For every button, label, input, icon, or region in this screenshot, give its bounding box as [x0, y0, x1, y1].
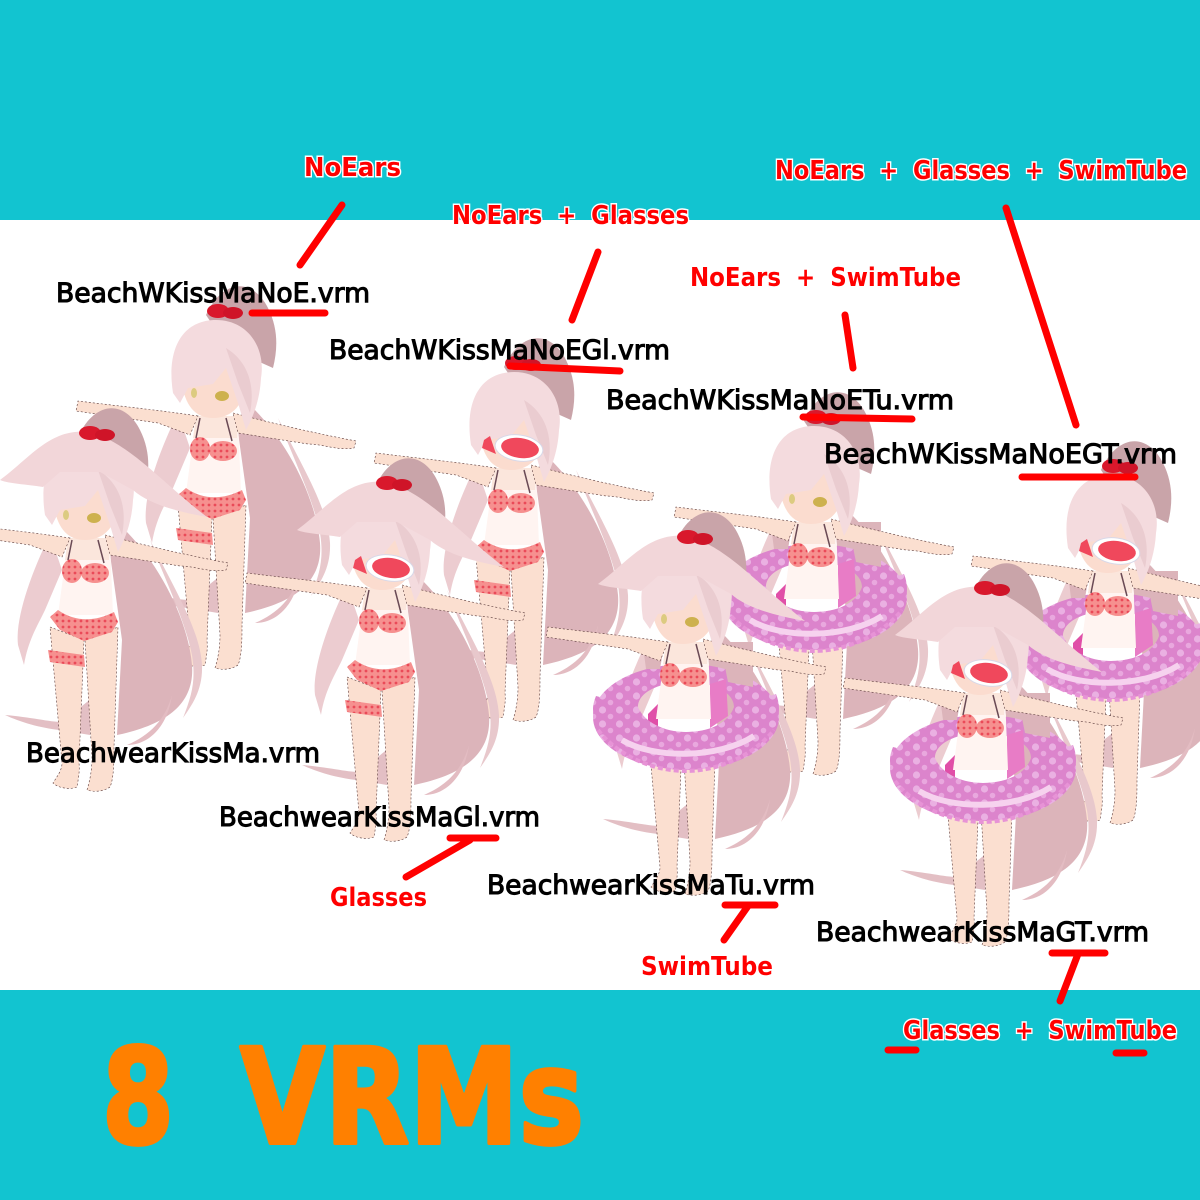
filename: BeachWKissMaNoETu: BeachWKissMaNoETu.vrm	[606, 385, 954, 416]
filename: BeachwearKissMaTu: BeachwearKissMaTu.vrm	[487, 870, 815, 901]
filename: BeachWKissMaNoEGl: BeachWKissMaNoEGl.vrm	[329, 335, 670, 366]
pointer: SwimTube	[724, 905, 775, 940]
filename: BeachWKissMaNoEGT: BeachWKissMaNoEGT.vrm	[824, 439, 1177, 470]
title: 8 VRMs: 8	[102, 1021, 174, 1175]
label: Glasses: Glasses	[330, 883, 427, 913]
figure: base model	[0, 408, 228, 791]
figure: swim tube	[546, 512, 826, 895]
figure: no ears with swim tube	[674, 392, 954, 775]
filename: BeachwearKissMaGT: BeachwearKissMaGT.vrm	[816, 917, 1149, 948]
label: NoEars + SwimTube: NoEars + SwimTube	[690, 263, 961, 293]
top banner	[0, 0, 1200, 220]
pointer: NoEars + SwimTube	[803, 315, 912, 419]
title: 8 VRMs: VRMs	[240, 1021, 584, 1175]
bottom banner	[0, 990, 1200, 1200]
pointer: NoEars	[252, 205, 342, 313]
pointer: NoEars + Glasses	[510, 252, 620, 371]
label: SwimTube: SwimTube	[641, 952, 773, 982]
label: NoEars: NoEars	[304, 153, 401, 183]
filename: BeachwearKissMaGl: BeachwearKissMaGl.vrm	[219, 802, 540, 833]
pointer: NoEars + Glasses + SwimTube	[1006, 208, 1135, 477]
pointer: Glasses	[406, 838, 496, 877]
underline: SwimTube	[1116, 1050, 1144, 1056]
figure: no ears with glasses	[374, 338, 654, 721]
figure: no ears	[76, 286, 356, 669]
label: NoEars + Glasses: NoEars + Glasses	[452, 201, 689, 231]
filename: BeachwearKissMa: BeachwearKissMa.vrm	[26, 738, 320, 769]
figure: glasses	[245, 458, 525, 841]
underline: Glasses	[888, 1046, 916, 1054]
pointer: Glasses + SwimTube	[1052, 953, 1105, 1001]
figure: glasses and swim tube	[843, 563, 1123, 946]
title: 8 VRMs	[102, 1021, 584, 1175]
filename: BeachWKissMaNoE: BeachWKissMaNoE.vrm	[56, 278, 370, 309]
figure: no ears with glasses and swim tube	[971, 441, 1200, 824]
